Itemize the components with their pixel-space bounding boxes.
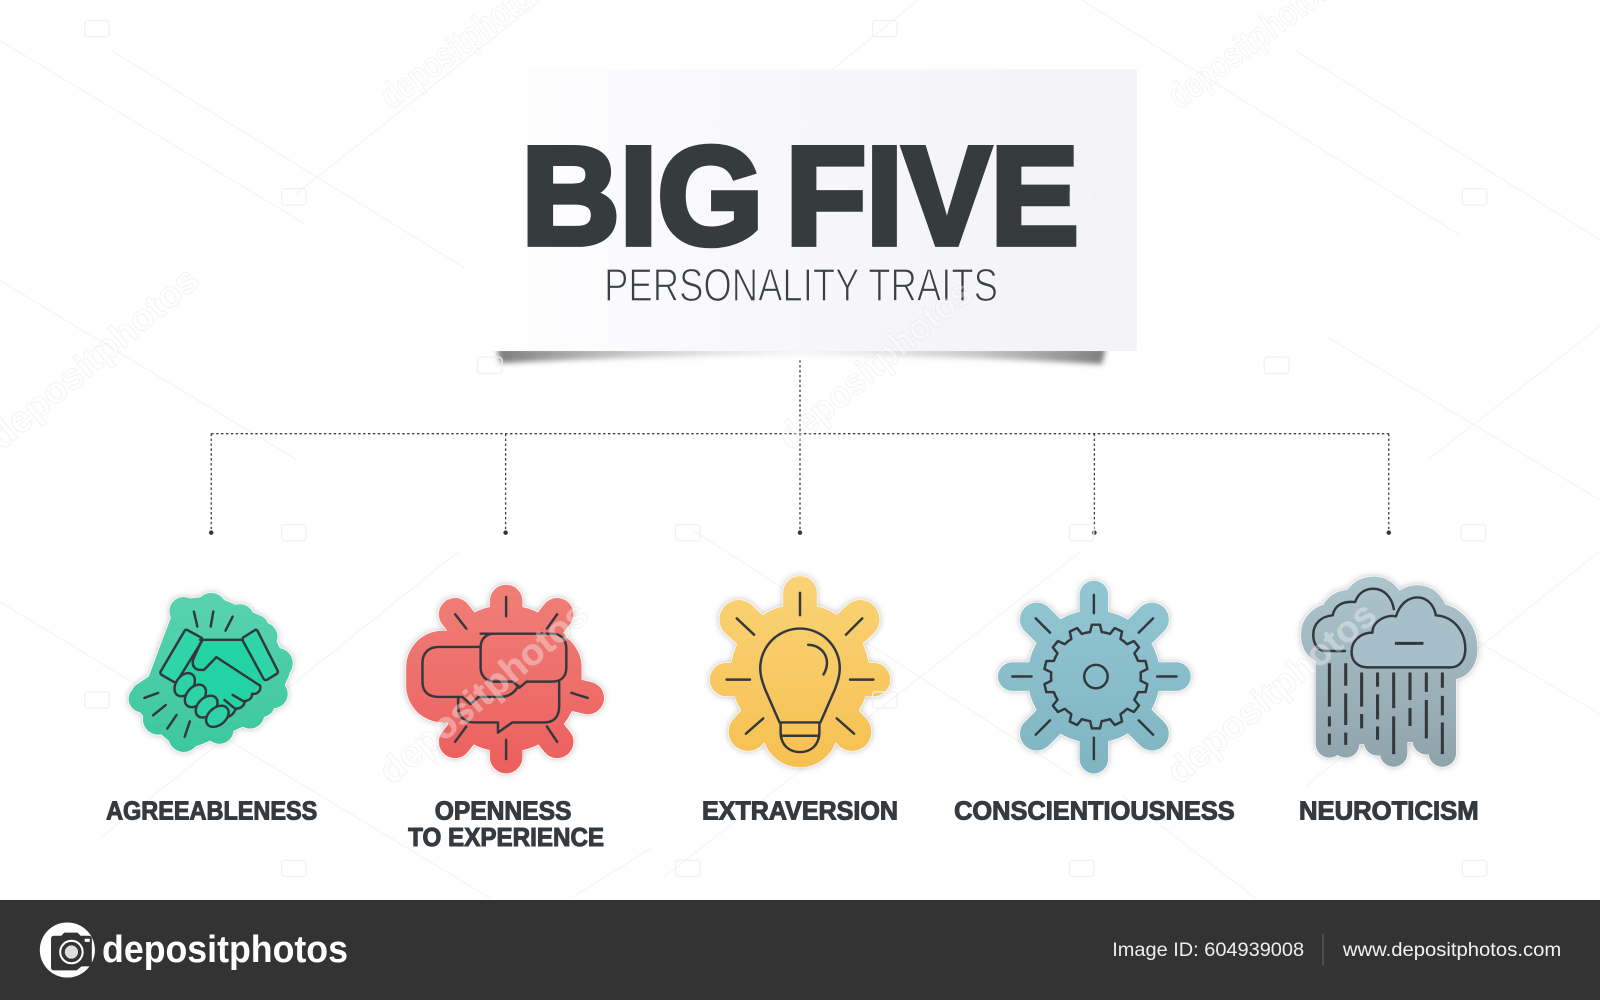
image id: Image ID: 604939008	[1112, 939, 1304, 961]
panel: title card	[464, 69, 1137, 364]
trait: conscientiousness	[954, 595, 1235, 825]
website: www.depositphotos.com	[1342, 939, 1561, 961]
logo: camera badge	[40, 922, 95, 978]
title: BIG FIVE	[521, 118, 1079, 274]
title: BIG FIVE: BIG	[521, 118, 763, 274]
watermark overlay: depositphotos	[1158, 593, 1384, 792]
watermark overlay: depositphotos	[371, 593, 596, 792]
trait: extraversion	[702, 593, 898, 825]
card shadow	[497, 347, 1106, 364]
watermark overlay: depositphotos	[770, 272, 980, 457]
title: BIG FIVE: FIVE	[786, 118, 1079, 274]
trait: neuroticism	[1299, 589, 1479, 825]
icon: light bulb	[727, 593, 873, 767]
label: openness to experience: OPENNESS	[435, 797, 571, 825]
dotted connector tree	[209, 360, 1391, 535]
trait: agreeableness	[106, 593, 317, 825]
label: neuroticism: NEUROTICISM	[1299, 797, 1479, 825]
icon: handshake	[129, 593, 293, 752]
logo wordmark: depositphotos	[102, 928, 348, 970]
label: openness to experience	[408, 797, 604, 852]
icon: gear	[1012, 595, 1177, 759]
label: conscientiousness: CONSCIENTIOUSNESS	[954, 797, 1235, 825]
trait: openness to experience	[406, 597, 604, 852]
icon: speech bubbles	[406, 597, 588, 759]
icon: rain clouds	[1313, 589, 1465, 754]
label: agreeableness: AGREEABLENESS	[106, 797, 317, 825]
label: openness to experience: TO EXPERIENCE	[408, 824, 604, 852]
label: extraversion: EXTRAVERSION	[702, 797, 898, 825]
card background	[464, 69, 1137, 351]
subtitle: personality traits: PERSONALITY TRAITS	[604, 259, 998, 311]
footer bar	[0, 900, 1600, 1000]
